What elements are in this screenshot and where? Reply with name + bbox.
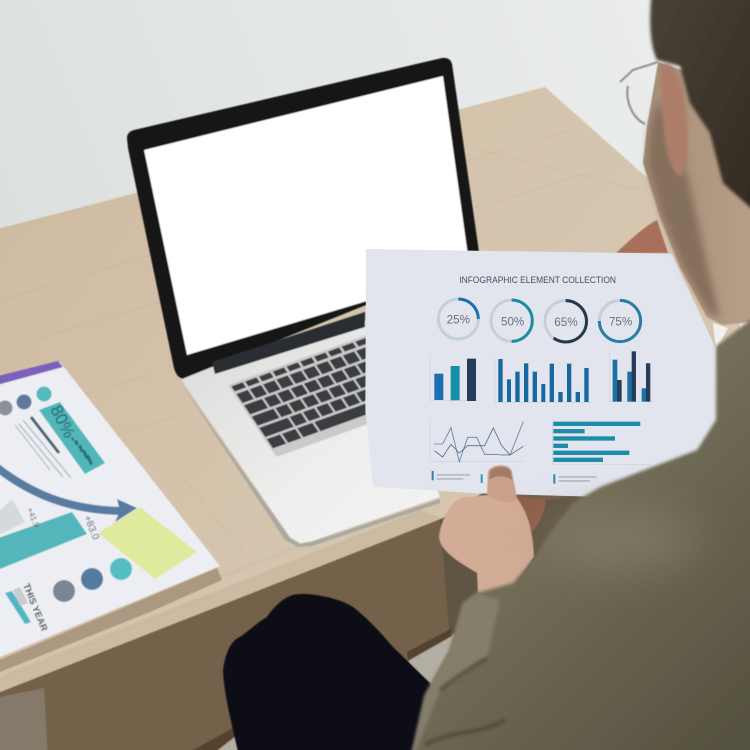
sheet title: INFOGRAPHIC ELEMENT COLLECTION bbox=[459, 275, 616, 285]
top circles bbox=[0, 386, 52, 416]
sheet bbox=[365, 249, 716, 497]
bar values bbox=[25, 506, 101, 542]
curved arrow bbox=[0, 462, 137, 522]
laptop keyboard bbox=[228, 334, 419, 457]
laptop base bbox=[180, 315, 440, 543]
bar values: +41.9 bbox=[25, 506, 41, 529]
sleeve bbox=[408, 593, 500, 750]
laptop screen bezel bbox=[127, 58, 479, 379]
bar values: +83.0 bbox=[81, 514, 101, 542]
bar chart 3 bbox=[609, 351, 653, 402]
donut 50%: 50% bbox=[501, 315, 524, 328]
palm bbox=[439, 495, 534, 594]
bottom circles bbox=[53, 558, 132, 602]
laptop bbox=[127, 58, 479, 547]
black trousers bbox=[223, 594, 432, 750]
holding hand bbox=[439, 465, 545, 594]
donut 75% bbox=[599, 300, 641, 342]
teal 80% panel: 80% bbox=[46, 402, 79, 441]
jacket highlight bbox=[540, 512, 700, 568]
donut 65% bbox=[545, 301, 587, 342]
gray area bbox=[0, 499, 25, 539]
bar chart 2 bbox=[495, 358, 592, 402]
purple marker strip bbox=[0, 361, 63, 387]
body copy lines bbox=[15, 417, 71, 478]
hair bbox=[650, 0, 750, 225]
left printed sheet bbox=[0, 361, 222, 676]
under-desk area bbox=[0, 480, 750, 750]
jacket crease bbox=[425, 658, 505, 745]
this year label: THIS YEAR bbox=[20, 582, 49, 633]
table leg bbox=[0, 688, 48, 750]
head and neck bbox=[643, 62, 750, 325]
seated man bbox=[408, 0, 750, 750]
donut 75%: 75% bbox=[609, 315, 632, 328]
upper fingers holding sheet bbox=[616, 220, 668, 253]
donut 65%: 65% bbox=[554, 316, 578, 329]
donut 25% bbox=[438, 299, 478, 339]
line chart bbox=[430, 418, 523, 462]
laptop screen bbox=[144, 76, 470, 355]
jaw stubble bbox=[647, 100, 720, 318]
sheet shadow bbox=[0, 568, 222, 676]
thumb bbox=[487, 465, 517, 502]
held paper chart sheet bbox=[365, 249, 716, 497]
bar chart 1 bbox=[430, 356, 478, 401]
far fingers bbox=[515, 497, 545, 532]
laptop hinge bbox=[212, 312, 365, 374]
teal bar bbox=[0, 512, 87, 573]
sticky note bbox=[98, 507, 197, 579]
donut 25%: 25% bbox=[447, 314, 470, 327]
glasses bbox=[620, 62, 658, 124]
horizontal bar chart bbox=[553, 419, 649, 464]
donut 50% bbox=[491, 300, 532, 341]
legend markers bbox=[432, 471, 597, 484]
teal 80% panel bbox=[39, 402, 105, 474]
ear bbox=[660, 64, 688, 177]
jacket bbox=[408, 305, 750, 750]
strut bbox=[175, 728, 236, 750]
this year bars bbox=[5, 587, 31, 624]
floor bbox=[408, 634, 470, 720]
white gap by collar bbox=[713, 323, 728, 350]
